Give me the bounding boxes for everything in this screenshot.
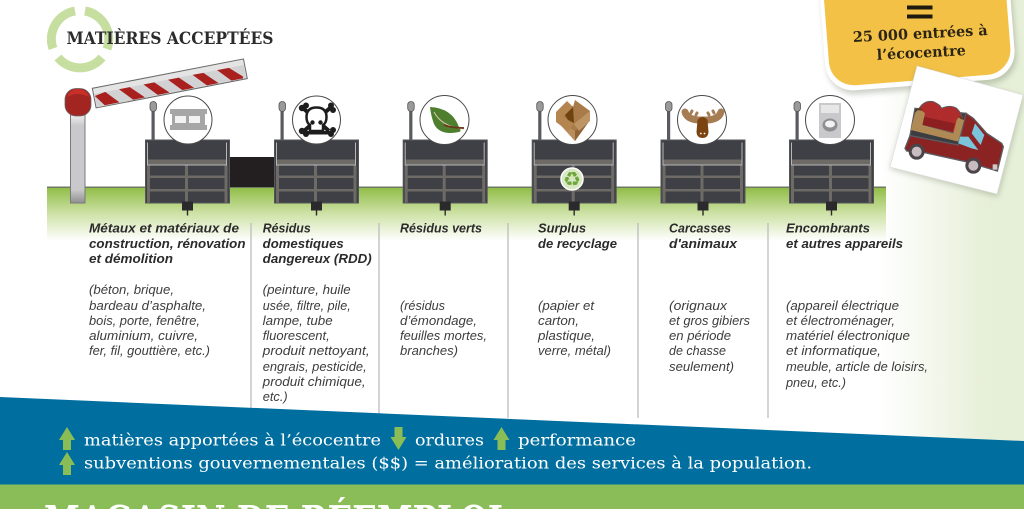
column: carcasses d'animaux: seulement) (669, 359, 734, 374)
right background tint (880, 0, 1024, 445)
column: encombrants: et autres appareils (786, 236, 903, 251)
column: résidus domestiques dangereux: usée, filtre, pile, (263, 298, 351, 313)
column: métaux: bois, porte, fenêtre, (89, 313, 200, 328)
connecting block (230, 157, 274, 187)
column: encombrants: matériel électronique (786, 328, 910, 343)
dividers (251, 223, 768, 418)
column: résidus verts: feuilles mortes, (400, 328, 487, 343)
column: métaux: (béton, brique, (89, 282, 174, 297)
arrow up 3 (59, 452, 75, 475)
column: métaux: et démolition (89, 251, 173, 266)
icon: concrete block (164, 96, 212, 144)
card text: 25 000 entrées à (852, 22, 989, 46)
column: encombrants (785, 220, 928, 390)
machine 5 (661, 102, 745, 216)
column: résidus verts: d’émondage, (400, 313, 477, 328)
column: métaux: construction, rénovation (89, 236, 246, 251)
column: résidus domestiques dangereux: produit chimique, (262, 374, 366, 389)
column: résidus verts: Résidus verts (400, 220, 482, 236)
column: résidus domestiques dangereux: (peinture, huile (263, 282, 351, 297)
card text (852, 22, 989, 64)
barrier head (65, 88, 91, 116)
yellow stat card (818, 0, 1019, 96)
icon: recycling symbol: ♻ (563, 167, 581, 191)
column: carcasses d'animaux: en période (669, 328, 731, 343)
column: surplus de recyclage: plastique, (537, 328, 595, 343)
summary text line 1: matières apportées à l’écocentre (84, 430, 381, 450)
summary text ordures: ordures (415, 430, 484, 450)
column: résidus verts: (résidus (400, 298, 445, 313)
column: métaux (89, 220, 246, 358)
card text: l’écocentre (876, 42, 966, 64)
column: résidus domestiques dangereux: fluorescent, (263, 328, 330, 343)
column: carcasses d'animaux: Carcasses (669, 220, 731, 236)
ground strip (47, 186, 886, 241)
column: carcasses d'animaux: et gros gibiers (669, 313, 750, 328)
column: carcasses d'animaux: de chasse (669, 343, 726, 358)
machine 4 (532, 102, 616, 216)
column: résidus verts: branches) (400, 343, 458, 358)
column: encombrants: et informatique, (786, 343, 881, 358)
column: résidus domestiques dangereux: Résidus (263, 220, 311, 236)
photo card: van with sofa (890, 66, 1024, 197)
arrow down (390, 427, 406, 450)
column: encombrants: Encombrants (786, 220, 870, 236)
column: métaux: fer, fil, gouttière, etc.) (89, 343, 210, 358)
icon: skull and crossbones (292, 96, 340, 144)
column: surplus de recyclage: (papier et (538, 298, 595, 313)
column: résidus domestiques dangereux: domestiques (263, 236, 344, 251)
column: surplus de recyclage (537, 220, 617, 358)
column: résidus domestiques dangereux (262, 220, 372, 404)
column: encombrants: pneu, etc.) (785, 375, 846, 390)
column: carcasses d'animaux: (orignaux (669, 298, 728, 313)
icon: moose head (678, 96, 726, 144)
barrier arm (92, 59, 247, 108)
column: surplus de recyclage: Surplus (538, 220, 586, 236)
van illustration (905, 101, 1003, 174)
column: encombrants: (appareil électrique (786, 298, 899, 313)
title: MATIÈRES ACCEPTÉES (66, 28, 274, 49)
column: encombrants: meuble, article de loisirs, (786, 359, 928, 374)
column: encombrants: et électroménager, (786, 313, 895, 328)
column: surplus de recyclage: carton, (538, 313, 579, 328)
arrow up 2 (494, 427, 510, 450)
icon: washing machine (806, 96, 854, 144)
icon: leaf (420, 96, 469, 144)
column: résidus domestiques dangereux: dangereux (RDD) (263, 251, 372, 266)
barrier post (70, 115, 85, 203)
summary text performance: performance (518, 430, 636, 450)
column: métaux: Métaux et matériaux de (89, 220, 239, 236)
column: surplus de recyclage: de recyclage (538, 236, 617, 251)
icon: cardboard box (548, 96, 597, 144)
arrow up 1 (59, 427, 75, 450)
machine 1 (146, 102, 230, 216)
column: résidus domestiques dangereux: lampe, tube (263, 313, 333, 328)
recycling ring logo (51, 11, 109, 68)
column: surplus de recyclage: verre, métal) (538, 343, 611, 358)
machine 2 (274, 102, 358, 216)
machine 6 (790, 102, 874, 216)
column: résidus domestiques dangereux: engrais, pesticide, (263, 359, 367, 374)
machine 3 (403, 102, 487, 216)
equals sign (907, 6, 932, 18)
column: métaux: aluminium, cuivre, (89, 328, 198, 343)
blue band (0, 397, 1024, 485)
column: résidus verts (400, 220, 487, 358)
green band (0, 484, 1024, 509)
column: carcasses d'animaux: d'animaux (669, 236, 738, 251)
column: métaux: bardeau d’asphalte, (89, 298, 206, 313)
summary text line 2: subventions gouvernementales ($$) = amélioration des services à la population. (84, 454, 812, 472)
column: résidus domestiques dangereux: produit nettoyant, (262, 343, 370, 358)
column: résidus domestiques dangereux: etc.) (263, 389, 288, 404)
column: carcasses d'animaux (669, 220, 750, 374)
